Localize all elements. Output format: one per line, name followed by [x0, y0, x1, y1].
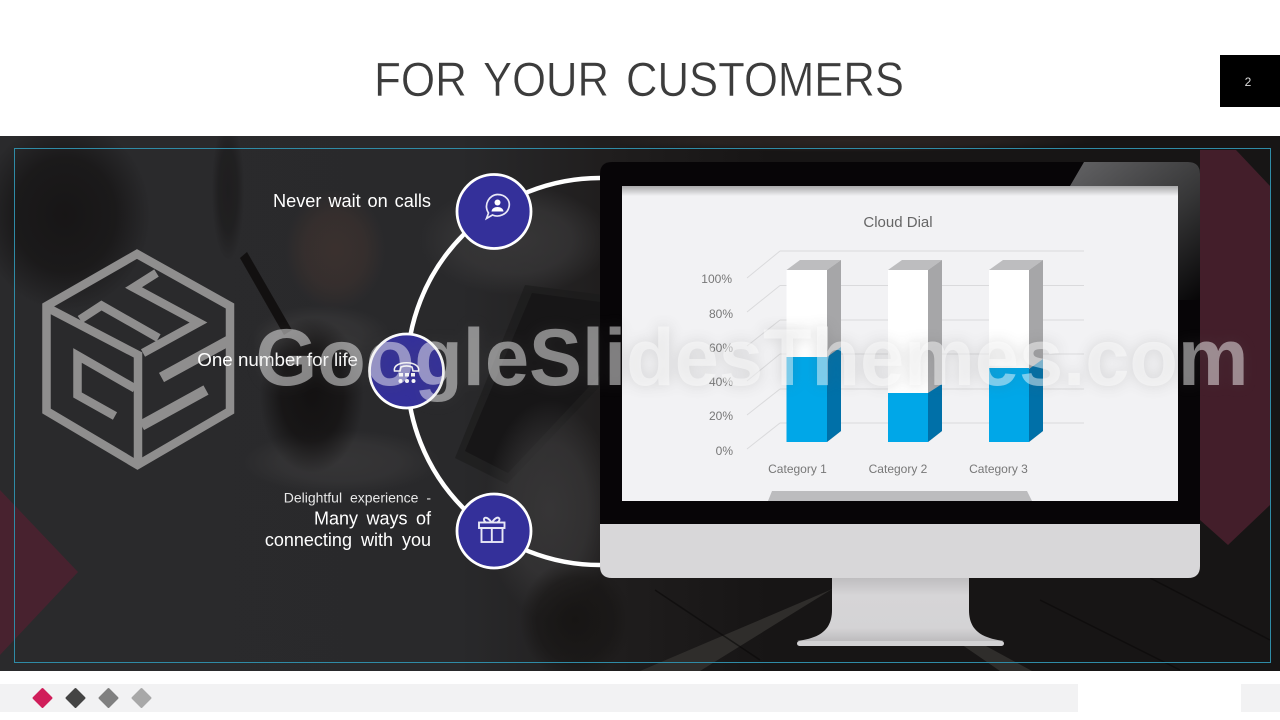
monitor chin — [600, 524, 1200, 578]
y axis labels: 0% — [716, 444, 733, 458]
title — [374, 54, 904, 107]
bar: category 1 — [786, 260, 841, 442]
icon: telephone — [394, 363, 419, 383]
icon: gift box — [479, 518, 504, 542]
page number badge: 2 — [1245, 75, 1252, 89]
page number badge — [1220, 55, 1280, 107]
category labels: Category 2 — [869, 462, 928, 476]
label: one number for life: One number for life — [197, 349, 358, 370]
screen — [622, 186, 1178, 501]
bezel glare — [1070, 162, 1200, 300]
screen base tab — [768, 491, 1032, 501]
site watermark: GoogleSlidesThemes.com — [256, 313, 1248, 403]
node: phone icon — [370, 334, 444, 408]
bar: category 3 — [989, 260, 1043, 442]
logo watermark cube — [46, 254, 230, 465]
site watermark: GoogleSlidesThemes.com — [256, 313, 1248, 403]
title: YOUR — [483, 54, 609, 107]
bottom bar — [0, 684, 1280, 712]
y axis labels: 80% — [709, 307, 733, 321]
node: gift icon — [457, 494, 531, 568]
node: chat icon — [457, 174, 531, 248]
chart title: Cloud Dial — [863, 214, 933, 231]
monitor bezel — [600, 162, 1200, 526]
y axis labels: 100% — [701, 272, 732, 286]
bar: category 2 — [888, 260, 942, 442]
y axis labels — [701, 272, 733, 458]
y axis labels: 20% — [709, 409, 733, 423]
label: delightful experience — [265, 490, 432, 550]
title: CUSTOMERS — [626, 54, 904, 107]
label: delightful experience: Delightful experience - — [284, 490, 431, 506]
category labels — [768, 462, 1028, 476]
background photo panel — [0, 120, 1280, 680]
label: delightful experience: Many ways of — [314, 508, 432, 528]
diamond markers — [34, 689, 150, 707]
label: delightful experience: connecting with you — [265, 530, 431, 550]
chart — [701, 214, 1084, 476]
category labels: Category 1 — [768, 462, 827, 476]
teal frame — [14, 148, 1270, 662]
connector arc — [407, 178, 600, 565]
y axis labels: 60% — [709, 341, 733, 355]
title: FOR — [374, 54, 467, 107]
monitor stand — [797, 576, 1004, 646]
icon: chat bubble with person — [486, 194, 509, 218]
y axis labels: 40% — [709, 375, 733, 389]
monitor — [600, 162, 1200, 646]
category labels: Category 3 — [969, 462, 1028, 476]
gridlines — [747, 251, 1084, 449]
screen top shadow — [622, 186, 1178, 196]
label: never wait on calls: Never wait on calls — [273, 191, 431, 211]
